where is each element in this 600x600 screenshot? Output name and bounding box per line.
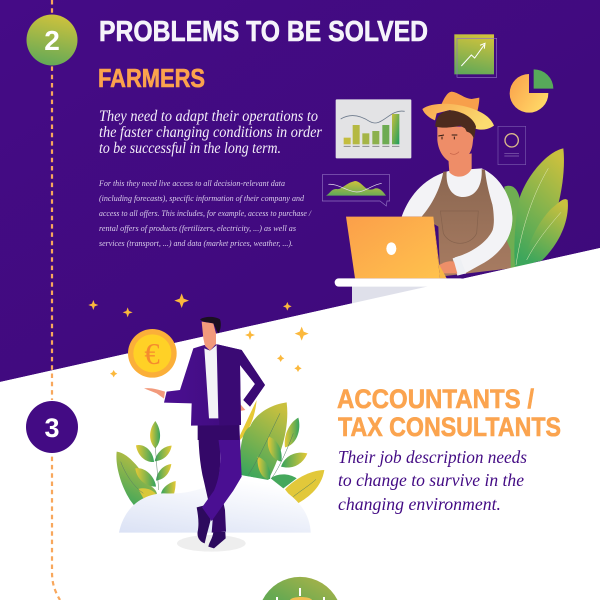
farmers intro text: They need to adapt their operations to bbox=[99, 108, 318, 125]
farmers detail text bbox=[98, 179, 312, 248]
apron pocket bbox=[440, 211, 478, 243]
shirt bbox=[204, 345, 218, 418]
shadow bbox=[177, 535, 246, 552]
sleeve bbox=[455, 170, 512, 273]
icon: speech bubble chart bbox=[322, 175, 390, 206]
farmers detail text: For this they need live access to all decision-relevant data bbox=[98, 179, 285, 188]
coin: € bbox=[144, 337, 160, 371]
hand bbox=[439, 261, 457, 273]
accountant illustration bbox=[88, 293, 324, 552]
left shoe bbox=[197, 505, 211, 543]
step 2 badge bbox=[26, 14, 78, 66]
accountants text: Their job description needs bbox=[338, 447, 527, 467]
face bbox=[437, 127, 474, 164]
heading: farmers: FARMERS bbox=[98, 65, 205, 93]
open hand bbox=[144, 388, 165, 399]
thigh shadow bbox=[220, 425, 239, 440]
icon: growth chart card bbox=[454, 34, 497, 77]
coin bbox=[128, 329, 177, 378]
left plant bbox=[116, 421, 176, 507]
dashed timeline bbox=[52, 0, 60, 600]
businessman upper body bbox=[144, 317, 265, 440]
title: PROBLEMS TO BE SOLVED bbox=[99, 16, 428, 48]
white diagonal panel bbox=[0, 248, 600, 600]
accountants text: to change to survive in the bbox=[338, 470, 524, 490]
farmer body bbox=[402, 168, 512, 277]
plant behind farmer bbox=[504, 148, 568, 268]
farmers intro text: to be successful in the long term. bbox=[99, 140, 281, 157]
purple background panel bbox=[0, 0, 600, 382]
icon: pie chart bbox=[510, 69, 553, 113]
icon: bar chart card bbox=[336, 99, 411, 158]
accountants text bbox=[338, 447, 527, 514]
right plant bbox=[217, 400, 324, 504]
hat crown bbox=[441, 92, 479, 112]
sparkles bbox=[88, 293, 309, 377]
heading: accountants bbox=[337, 384, 561, 442]
shirt bbox=[402, 168, 512, 274]
neck bbox=[448, 153, 472, 177]
heading: accountants: TAX CONSULTANTS bbox=[338, 412, 561, 442]
right shoe bbox=[208, 532, 226, 548]
step 3 badge: 3 bbox=[44, 413, 60, 443]
step 4 badge with sun icon bbox=[262, 577, 338, 600]
farmers intro text: the faster changing conditions in order bbox=[99, 124, 323, 141]
businessman legs bbox=[197, 425, 242, 548]
farmer head bbox=[422, 92, 494, 177]
hand on hip bbox=[239, 403, 245, 411]
farmers detail text: access to all offers. This includes, for example, access to purchase / bbox=[99, 209, 312, 218]
farmers detail text: services (transport, ...) and data (market prices, weather, ...). bbox=[99, 239, 293, 248]
hair bbox=[200, 317, 221, 333]
step 3 badge bbox=[26, 401, 78, 453]
farmers intro text bbox=[99, 108, 323, 157]
farmers detail text: (including forecasts), specific information of their company and bbox=[99, 194, 305, 203]
cuff bbox=[453, 256, 466, 276]
eyebrows and eyes bbox=[438, 135, 457, 139]
apron bbox=[422, 169, 511, 277]
back leg bbox=[198, 425, 226, 533]
icon: document card bbox=[498, 126, 526, 165]
front leg bbox=[202, 425, 242, 521]
hill bbox=[119, 476, 311, 533]
farmer illustration bbox=[322, 34, 568, 313]
hat brim bbox=[422, 104, 494, 130]
farmers detail text: rental offers of products (fertilizers, electricity, ...) as well as bbox=[99, 224, 296, 233]
smile bbox=[450, 152, 459, 154]
trousers top bbox=[198, 423, 239, 440]
hair bbox=[435, 110, 476, 139]
table bbox=[335, 278, 465, 313]
neck and face bbox=[202, 322, 216, 351]
accountants text: changing environment. bbox=[338, 494, 501, 514]
heading: accountants: ACCOUNTANTS / bbox=[337, 384, 534, 414]
jacket bbox=[164, 344, 265, 426]
step 2 badge: 2 bbox=[44, 25, 60, 56]
jacket right side shade bbox=[217, 344, 265, 425]
laptop bbox=[346, 217, 447, 278]
